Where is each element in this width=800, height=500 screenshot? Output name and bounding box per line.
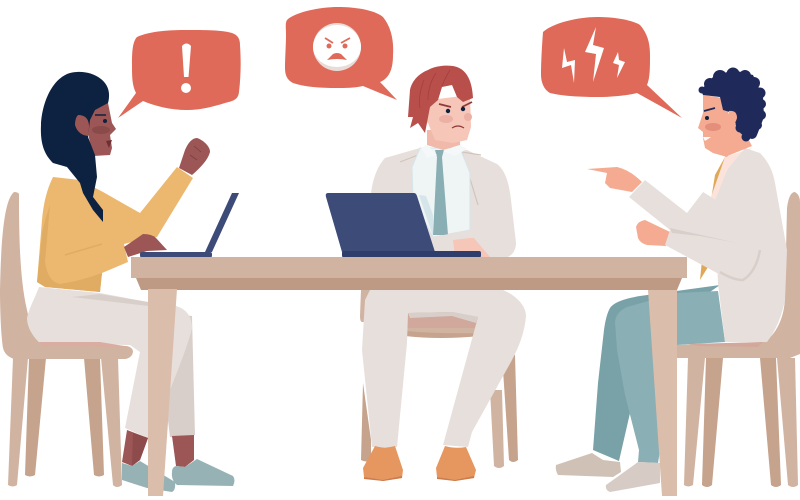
tie [700, 157, 725, 280]
left chair [0, 192, 133, 487]
lower sleeve [665, 230, 753, 282]
center chair [360, 290, 518, 468]
jacket [371, 148, 516, 258]
person: right man pointing [556, 68, 787, 492]
trousers [362, 290, 526, 447]
pointing hand [587, 167, 642, 192]
face [85, 100, 116, 156]
right chair [677, 192, 800, 487]
typing hand [124, 234, 167, 257]
shoes [363, 446, 403, 481]
shirt [412, 148, 470, 237]
face [428, 95, 471, 143]
raised fist [179, 138, 210, 175]
speech bubble: lightning bolts [541, 17, 682, 118]
tie [433, 150, 448, 235]
front leg [615, 291, 725, 463]
shoes [556, 453, 621, 477]
sweater [37, 167, 193, 292]
hair [41, 72, 109, 222]
table [131, 257, 687, 496]
curly hair [698, 68, 766, 142]
face [698, 95, 743, 157]
person: woman with laptop [27, 72, 234, 492]
ankles [122, 430, 148, 466]
speech bubble: angry face [285, 7, 397, 100]
speech bubble: exclamation [118, 30, 241, 118]
ear [75, 115, 89, 136]
hair [408, 66, 473, 133]
pointing sleeve [629, 180, 716, 240]
shirt [706, 148, 752, 273]
person: center man [362, 66, 526, 481]
ear [729, 111, 737, 125]
lower fist [636, 220, 670, 246]
collar [421, 145, 467, 158]
back leg [593, 285, 720, 461]
laptop: left [140, 193, 239, 258]
hand on table [453, 237, 490, 257]
neck [725, 130, 752, 157]
laptop: center [326, 193, 481, 258]
shoes [122, 461, 175, 492]
jacket [714, 148, 787, 342]
neck [427, 130, 460, 150]
trousers [145, 310, 195, 437]
